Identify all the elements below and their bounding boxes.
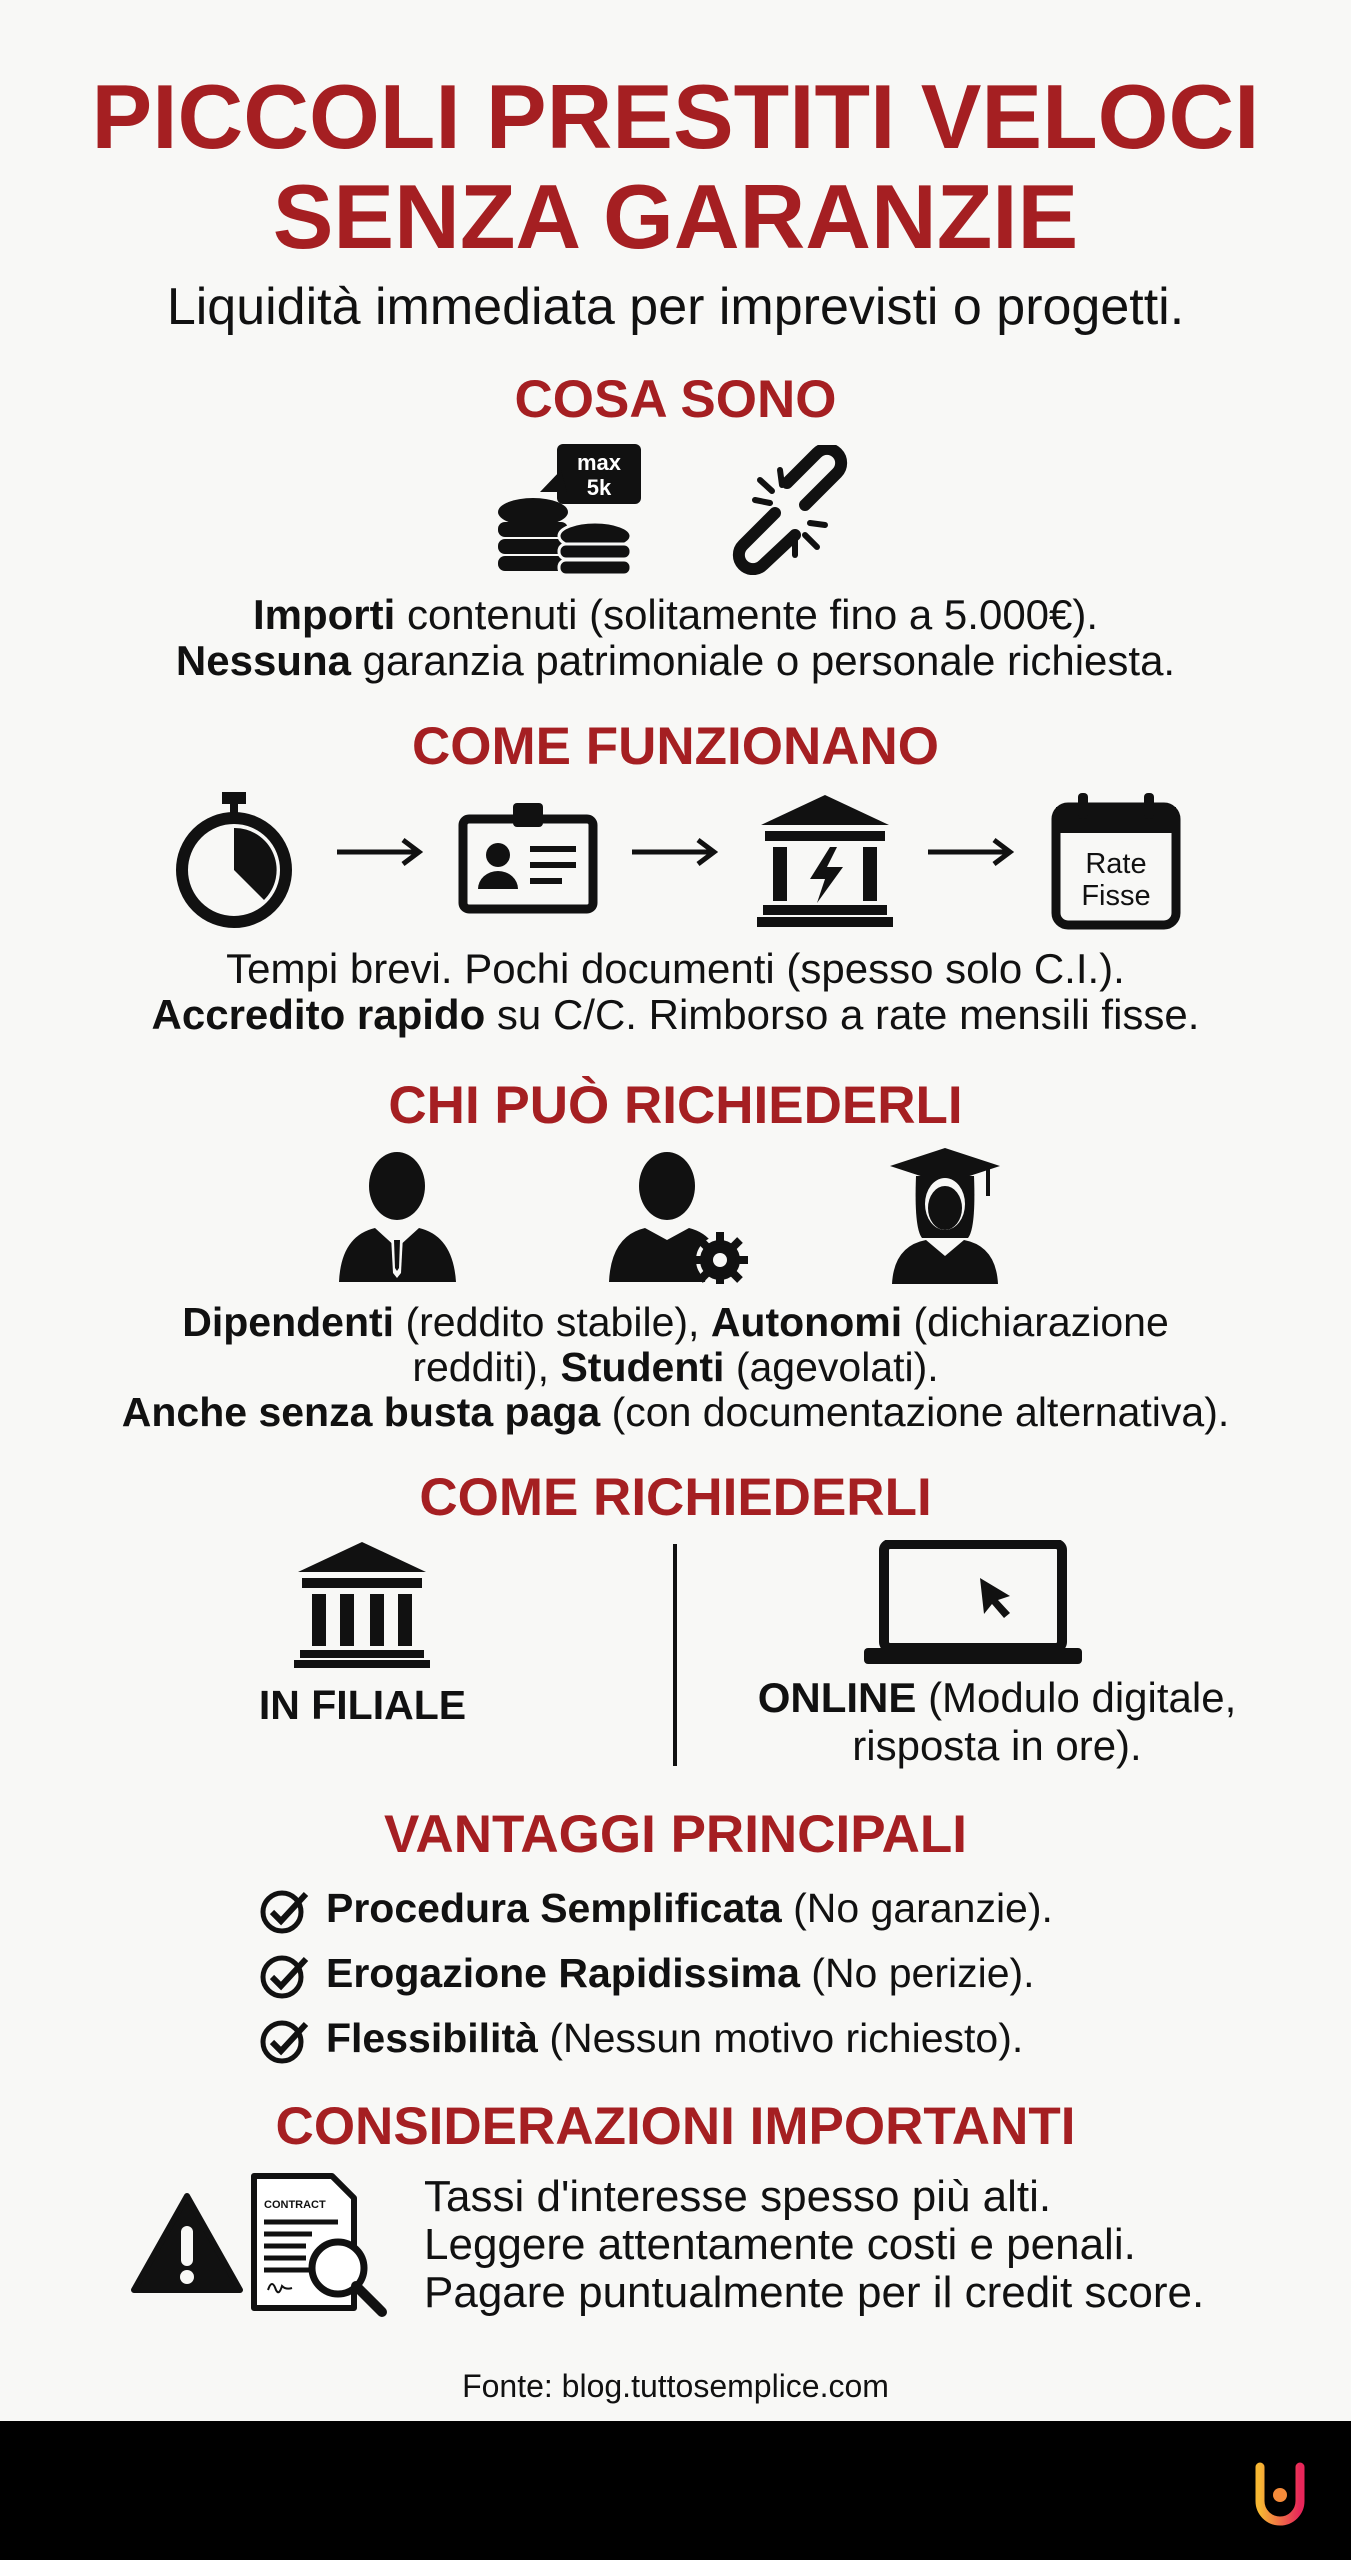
- label: online: risposta in ore).: [852, 1722, 1142, 1769]
- icon: id card: [458, 803, 598, 914]
- text: chi può: redditi), Studenti (agevolati).: [412, 1344, 939, 1390]
- text: come funzionano: [152, 945, 1199, 1038]
- heading: come richiederli: COME RICHIEDERLI: [419, 1468, 932, 1527]
- title: PICCOLI PRESTITI VELOCI: [92, 67, 1259, 168]
- text: considerazioni: Pagare puntualmente per il credit score.: [424, 2268, 1204, 2317]
- text: chi può: Anche senza busta paga (con documentazione alternativa).: [122, 1389, 1229, 1435]
- list: vantaggi: [260, 1885, 1053, 2064]
- subtitle: Liquidità immediata per imprevisti o progetti.: [167, 278, 1184, 336]
- text: come funzionano: Accredito rapido su C/C. Rimborso a rate mensili fisse.: [152, 991, 1199, 1038]
- text: cosa sono: Nessuna garanzia patrimoniale o personale richiesta.: [176, 637, 1175, 684]
- text: cosa sono: Importi contenuti (solitamente fino a 5.000€).: [253, 591, 1098, 638]
- text: considerazioni: [424, 2172, 1204, 2317]
- arrow: [632, 838, 718, 866]
- panel: in filiale: [259, 1542, 466, 1728]
- icon: calendar rate fisse: [1052, 793, 1180, 930]
- title: [92, 67, 1259, 268]
- footer bar: [0, 2421, 1351, 2560]
- text: considerazioni: Leggere attentamente costi e penali.: [424, 2220, 1136, 2269]
- icon: contract magnifier: CONTRACT: [264, 2199, 326, 2211]
- heading: vantaggi: VANTAGGI PRINCIPALI: [384, 1805, 967, 1864]
- icon: coins max 5k: [498, 444, 641, 574]
- heading: chi può richiederli: CHI PUÒ RICHIEDERLI: [388, 1076, 963, 1135]
- source: Fonte: blog.tuttosemplice.com: [462, 2368, 889, 2404]
- text: cosa sono: [176, 591, 1175, 684]
- title: SENZA GARANZIE: [273, 167, 1078, 268]
- icon: laptop with cursor: [864, 1540, 1082, 1664]
- heading: considerazioni: CONSIDERAZIONI IMPORTANTI: [276, 2097, 1075, 2156]
- label: online: [758, 1674, 1236, 1769]
- icon: employee: [339, 1152, 456, 1282]
- heading: come funzionano: COME FUNZIONANO: [412, 717, 939, 776]
- divider: [673, 1544, 677, 1766]
- icon: self-employed with gear: [609, 1152, 748, 1284]
- text: come funzionano: Tempi brevi. Pochi documenti (spesso solo C.I.).: [226, 945, 1125, 992]
- icon: calendar rate fisse: Fisse: [1081, 880, 1151, 912]
- icons row: process: [176, 792, 1180, 930]
- icon: contract magnifier: [251, 2173, 387, 2317]
- item 3: Flessibilità (Nessun motivo richiesto).: [326, 2015, 1023, 2061]
- panel: online: [758, 1540, 1236, 1769]
- icon: student: [890, 1148, 1000, 1284]
- arrow: [337, 838, 423, 866]
- item 1: Procedura Semplificata (No garanzie).: [326, 1885, 1053, 1931]
- icon: coins max 5k: max: [577, 450, 622, 475]
- icon: bank: [294, 1542, 430, 1668]
- arrow: [928, 838, 1014, 866]
- icon: stopwatch: [176, 792, 292, 928]
- icon: warning: [131, 2193, 243, 2293]
- icon: coins max 5k: 5k: [587, 475, 612, 500]
- icon: bank with lightning: [757, 795, 893, 927]
- text: chi può: [122, 1299, 1229, 1435]
- text: chi può: Dipendenti (reddito stabile), Autonomi (dichiarazione: [182, 1299, 1169, 1345]
- icon: calendar rate fisse: Rate: [1085, 848, 1147, 880]
- heading: cosa sono: COSA SONO: [515, 370, 836, 429]
- item 2: Erogazione Rapidissima (No perizie).: [326, 1950, 1035, 1996]
- label: online: ONLINE (Modulo digitale,: [758, 1674, 1236, 1721]
- text: considerazioni: Tassi d'interesse spesso più alti.: [424, 2172, 1051, 2221]
- icon: broken link: [732, 445, 848, 575]
- label: in filiale: IN FILIALE: [259, 1682, 466, 1728]
- icon: logo: [1256, 2462, 1304, 2526]
